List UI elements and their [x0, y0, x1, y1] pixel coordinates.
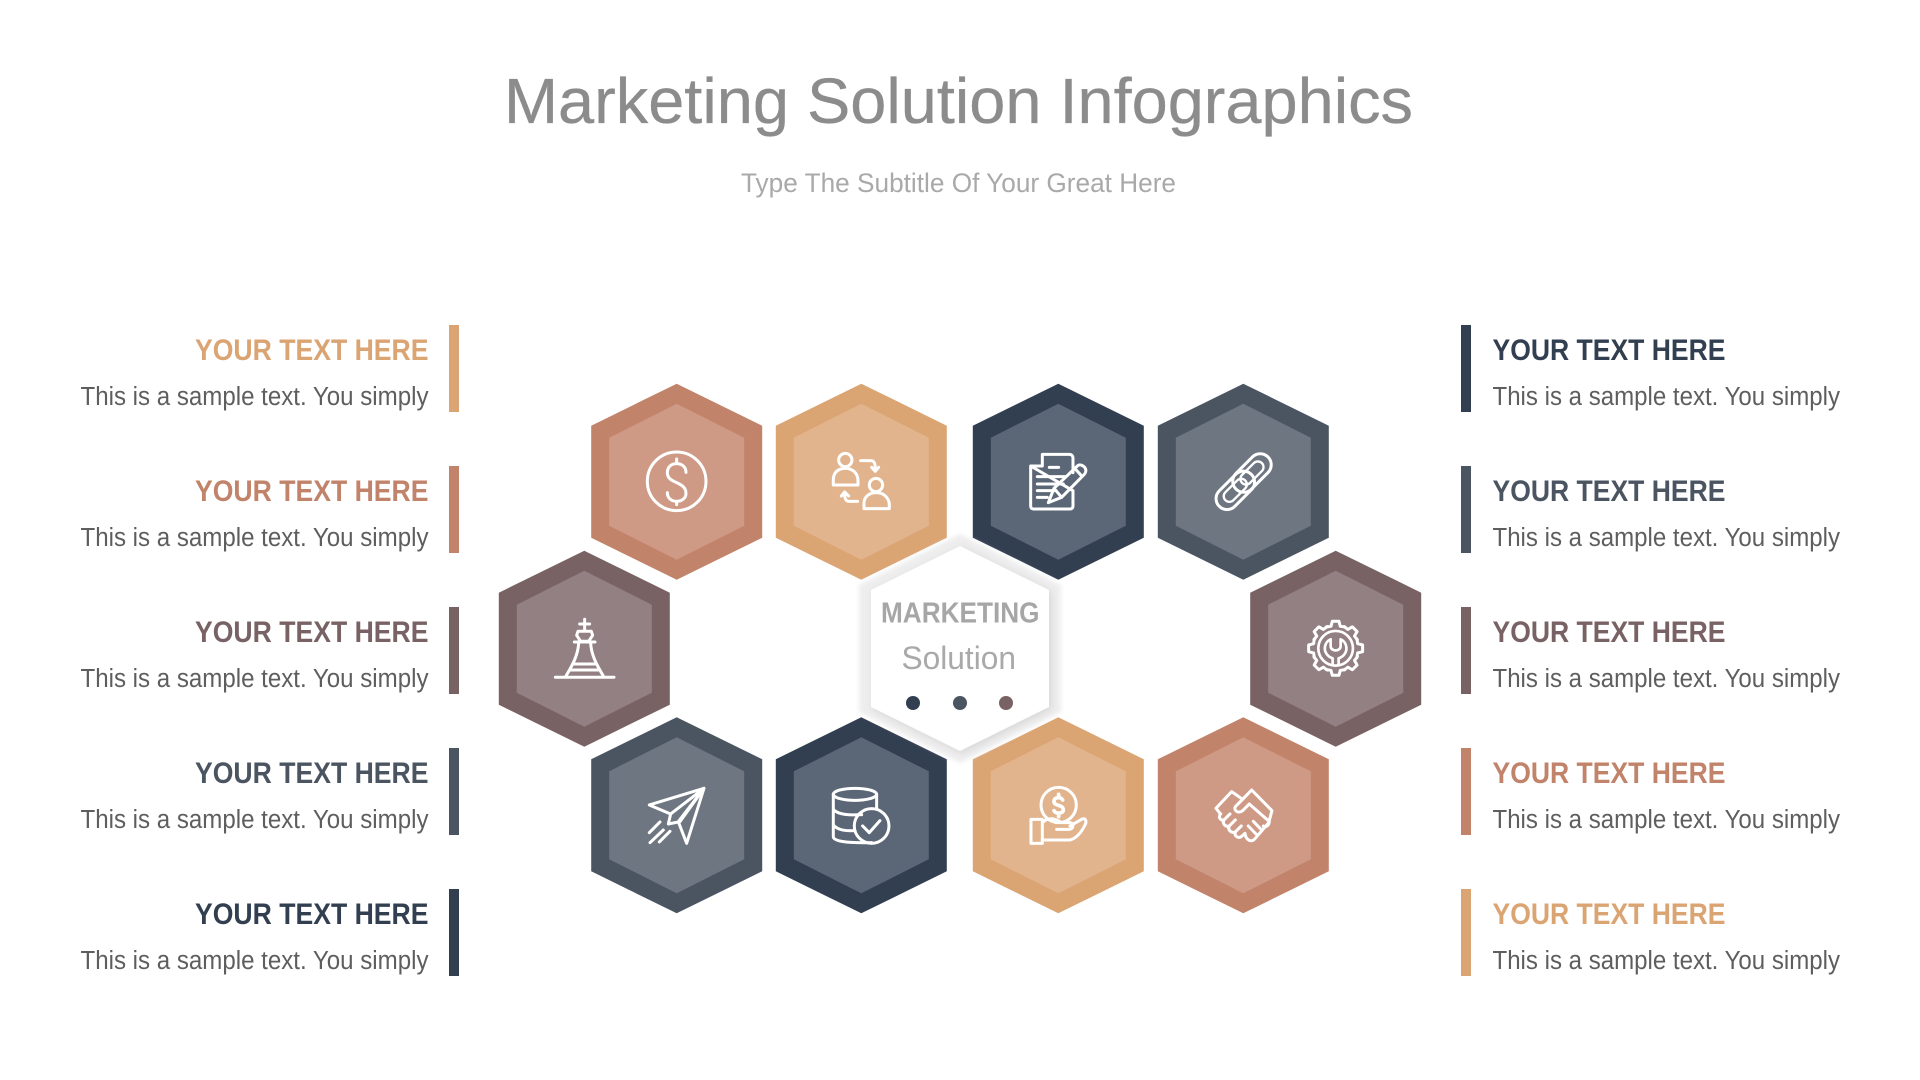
right item 4: [1461, 748, 1840, 835]
right item 1: This is a sample text. You simply: [1492, 383, 1840, 411]
left item 4: [80, 748, 459, 835]
center heading: MARKETING: [881, 598, 1040, 630]
left item 1: This is a sample text. You simply: [80, 383, 429, 411]
right item 2: YOUR TEXT HERE: [1492, 475, 1726, 508]
right item 2: [1461, 466, 1840, 553]
right item 5: YOUR TEXT HERE: [1492, 898, 1726, 931]
left item 1: YOUR TEXT HERE: [195, 334, 428, 367]
left item 5: This is a sample text. You simply: [80, 947, 429, 975]
hexagon: notes and pencil: [973, 384, 1144, 580]
left item 2: [80, 466, 459, 553]
right item 1: YOUR TEXT HERE: [1492, 334, 1726, 367]
right item 4: YOUR TEXT HERE: [1492, 757, 1726, 790]
right item 3: YOUR TEXT HERE: [1492, 616, 1726, 649]
hexagon: database check: [776, 717, 947, 913]
hexagon: dollar coin: [591, 384, 762, 580]
left item 3: This is a sample text. You simply: [80, 665, 429, 693]
title: Marketing Solution Infographics: [504, 65, 1413, 137]
left item 3: YOUR TEXT HERE: [195, 616, 428, 649]
hexagon: paper plane: [591, 717, 762, 913]
right item 3: [1461, 607, 1840, 694]
right item 2: This is a sample text. You simply: [1492, 524, 1840, 552]
left item 5: [80, 889, 459, 976]
right item 5: This is a sample text. You simply: [1492, 947, 1840, 975]
left item 2: YOUR TEXT HERE: [195, 475, 428, 508]
right item 1: [1461, 325, 1840, 412]
hexagon: people exchange: [776, 384, 947, 580]
left item 4: YOUR TEXT HERE: [195, 757, 428, 790]
left item 5: YOUR TEXT HERE: [195, 898, 428, 931]
right item 3: This is a sample text. You simply: [1492, 665, 1840, 693]
center hexagon: [859, 534, 1061, 763]
left item 4: This is a sample text. You simply: [80, 806, 429, 834]
hexagon: hand holding coin: [973, 717, 1144, 913]
left item 1: [80, 325, 459, 412]
left item 2: This is a sample text. You simply: [80, 524, 429, 552]
left item 3: [80, 607, 459, 694]
hexagon: gear and wrench: [1250, 551, 1421, 747]
subtitle: Type The Subtitle Of Your Great Here: [741, 168, 1176, 198]
hexagon: handshake: [1158, 717, 1329, 913]
right item 5: [1461, 889, 1840, 976]
right item 4: This is a sample text. You simply: [1492, 806, 1840, 834]
center dots: [906, 696, 1013, 710]
hexagon: chain link: [1158, 384, 1329, 580]
hexagon: chess king: [499, 551, 670, 747]
center subheading: Solution: [902, 640, 1016, 676]
